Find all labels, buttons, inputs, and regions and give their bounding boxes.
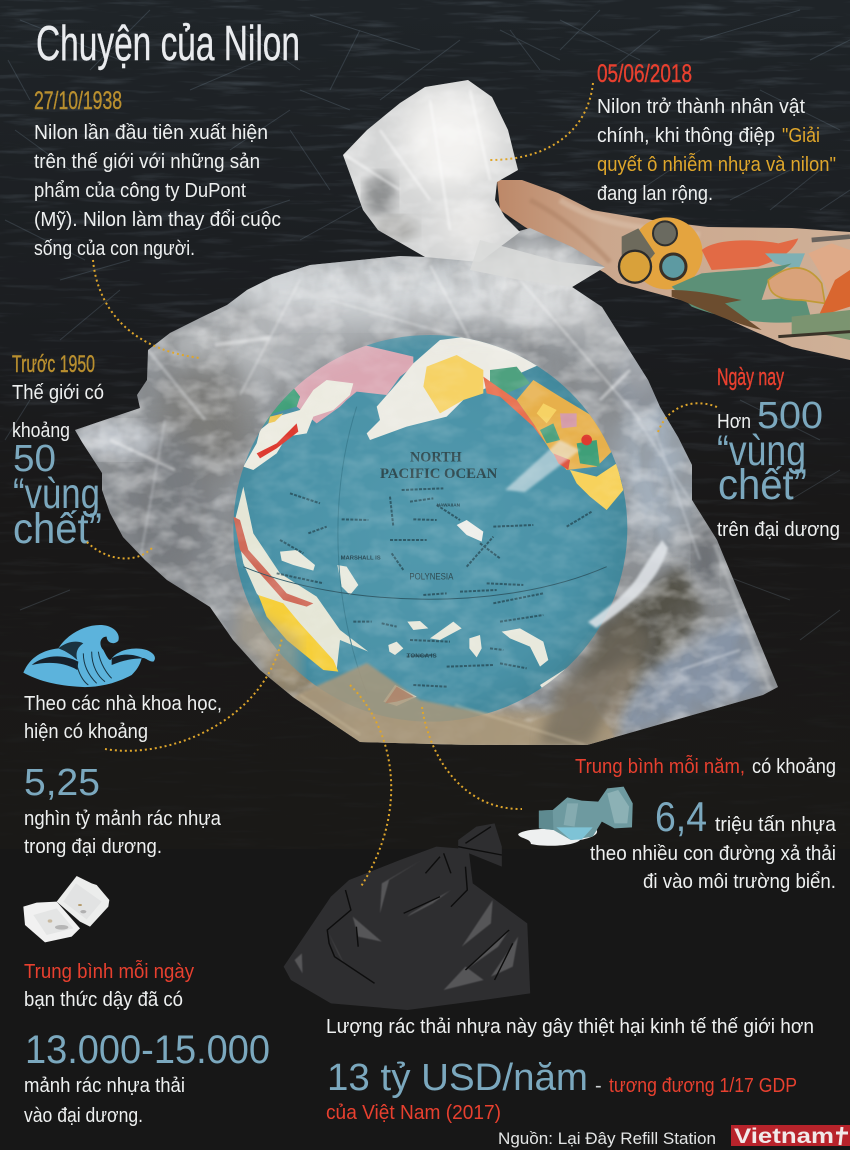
icon: crushed plastic bottle [518, 787, 633, 846]
source credit: Nguồn: Lại Đây Refill Station [498, 1129, 716, 1148]
dotted connector: 50 dead zones [87, 542, 152, 558]
text block: today: trên đại dương [717, 519, 840, 541]
text block: before 1950: 50 [13, 438, 56, 480]
text block: today: chết” [718, 461, 807, 509]
globe [233, 333, 627, 722]
text block: 05/06/2018: Nilon trở thành nhân vật [597, 96, 805, 118]
globe: MARSHALL IS [341, 555, 381, 561]
text block: 27/10/1938: (Mỹ). Nilon làm thay đổi cuộc [34, 209, 281, 231]
text block: economic damage: Lượng rác thải nhựa này gây thiệt hại kinh tế thế giới hơn [326, 1016, 814, 1038]
Mexico [570, 463, 623, 510]
photo: tattooed arm [497, 180, 850, 360]
photo: transparent plastic bag with globe [60, 220, 790, 760]
text block: 5,25 trillion pieces: nghìn tỷ mảnh rác nhựa [24, 808, 222, 830]
text block: today [717, 364, 840, 541]
text block: 27/10/1938: Nilon lần đầu tiên xuất hiện [34, 122, 268, 144]
text block: 13.000-15.000 per day: 13.000-15.000 [25, 1028, 270, 1072]
USA [517, 380, 613, 470]
text block: 6,4 million tons [575, 755, 837, 893]
photo: knotted top of the bag [340, 80, 605, 287]
text block: 6,4 million tons: triệu tấn nhựa [715, 814, 837, 836]
globe: PACIFIC OCEAN [380, 466, 498, 482]
text block: economic damage: tương đương 1/17 GDP [609, 1075, 797, 1097]
icon: foam food box [23, 876, 109, 942]
text block: 5,25 trillion pieces: hiện có khoảng [24, 721, 148, 743]
text block: 05/06/2018: đang lan rộng. [597, 183, 713, 205]
text block: 13.000-15.000 per day: bạn thức dậy đã có [24, 989, 183, 1011]
text block: today: Hơn [717, 411, 751, 433]
globe: NORTH [410, 450, 462, 466]
text block: 5,25 trillion pieces [24, 693, 222, 858]
bottom band [0, 849, 850, 1150]
text block: 13.000-15.000 per day: Trung bình mỗi ngày [24, 960, 194, 983]
text block: 6,4 million tons: theo nhiều con đường xả thải [590, 843, 836, 865]
text block: 05/06/2018: chính, khi thông điệp [597, 125, 775, 147]
logo: Vietnam+ [731, 1125, 850, 1148]
text block: 6,4 million tons: có khoảng [752, 756, 836, 778]
Alaska and Canada [366, 338, 537, 440]
text block: 05/06/2018: "Giải [782, 125, 820, 147]
text block: 27/10/1938: phẩm của công ty DuPont [34, 180, 246, 202]
text block: 6,4 million tons: 6,4 [655, 793, 707, 840]
text block: 5,25 trillion pieces: trong đại dương. [24, 836, 162, 858]
seams and small map labels [338, 406, 358, 668]
text block: before 1950: “vùng [13, 470, 100, 518]
Russia [294, 346, 414, 424]
globe: TONGA IS [407, 653, 437, 659]
dotted connector: 2018 to knot [490, 83, 593, 160]
text block: economic damage: - [595, 1075, 602, 1097]
text block: before 1950: Thế giới có [12, 382, 104, 404]
text block: economic damage: của Việt Nam (2017) [326, 1102, 501, 1124]
icon: ocean wave [23, 625, 155, 687]
text block: economic damage: 13 tỷ USD/năm [327, 1057, 588, 1099]
text block: 13.000-15.000 per day: vào đại dương. [24, 1105, 143, 1127]
icon: black trash bag [284, 823, 530, 1010]
text block: 05/06/2018 [597, 60, 836, 205]
text block: 6,4 million tons: Trung bình mỗi năm, [575, 755, 745, 778]
text block: before 1950: khoảng [12, 420, 70, 442]
globe: POLYNESIA [409, 571, 454, 581]
globe: HAWAIIAN [437, 503, 461, 508]
islands [280, 550, 315, 571]
text block: 5,25 trillion pieces: Theo các nhà khoa học, [24, 693, 222, 715]
textured dark background [0, 0, 850, 640]
text block: 13.000-15.000 per day [24, 960, 270, 1127]
text block: today: Ngày nay [717, 364, 784, 391]
Australia [258, 595, 338, 672]
dotted connector: globe to trash bag [350, 685, 391, 888]
bag film over the globe [110, 228, 772, 745]
text block: before 1950: Trước 1950 [12, 351, 95, 378]
text block: 27/10/1938: 27/10/1938 [34, 87, 122, 115]
text block: economic damage [326, 1016, 814, 1124]
text block: today: 500 [757, 395, 823, 437]
text block: 13.000-15.000 per day: mảnh rác nhựa thải [24, 1075, 185, 1097]
text block: 5,25 trillion pieces: 5,25 [24, 762, 100, 804]
Asia coast [235, 487, 368, 670]
logo: Vietnam+: Vietnam [734, 1125, 834, 1148]
text block: today: “vùng [717, 427, 806, 475]
text block: 6,4 million tons: đi vào môi trường biển. [643, 871, 836, 893]
text block: 05/06/2018: quyết ô nhiễm nhựa và nilon" [597, 153, 836, 176]
dotted connector: 500 dead zones [658, 403, 717, 432]
dotted connector: wave text to bag [105, 638, 282, 751]
text block: 27/10/1938 [34, 87, 281, 260]
tattoo [619, 217, 850, 340]
title: Chuyện của Nilon [36, 17, 300, 71]
text block: before 1950 [12, 351, 104, 553]
dotted connector: globe to bottle [422, 707, 522, 809]
text block: 27/10/1938: trên thế giới với những sản [34, 151, 260, 173]
text block: 27/10/1938: sống của con người. [34, 238, 195, 260]
text block: before 1950: chết” [13, 505, 102, 553]
text block: 05/06/2018: 05/06/2018 [597, 60, 692, 88]
dotted connector: 1938 to bag [93, 260, 200, 358]
